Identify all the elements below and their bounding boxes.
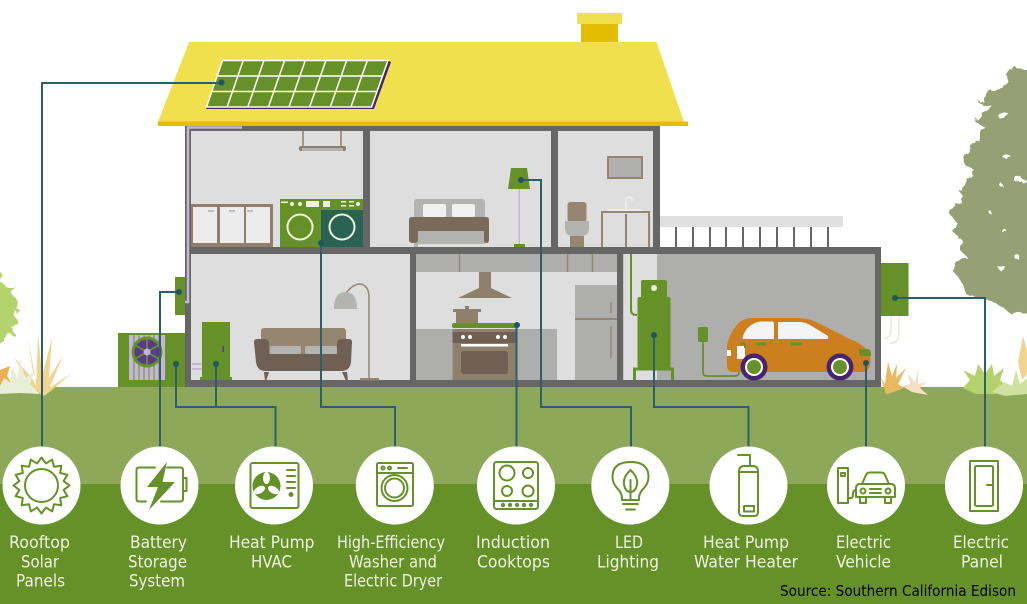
- label: electric vehicle: [836, 533, 891, 572]
- label: electric vehicle: Electric: [836, 533, 891, 553]
- laundry cabinets: [191, 204, 273, 247]
- right plants: [881, 336, 1027, 396]
- electric panel unit: [881, 263, 908, 343]
- left plants: [0, 334, 72, 396]
- room: bedroom: [370, 131, 551, 247]
- right tree: [950, 68, 1027, 320]
- walls: [185, 126, 881, 387]
- label: heat pump hvac: HVAC: [251, 552, 292, 572]
- line: water heater: [654, 335, 748, 447]
- line: induction: [516, 325, 518, 447]
- line: led: [521, 180, 631, 447]
- ceiling light: [299, 131, 346, 151]
- icon: led bulb: [591, 446, 669, 524]
- label: high-efficiency washer and electric dryer: [337, 533, 445, 592]
- label: electric panel: Panel: [961, 552, 1003, 572]
- kitchen background: [416, 254, 617, 380]
- icon: heat pump hvac: [235, 446, 313, 524]
- label: heat pump water heater: Water Heater: [694, 552, 798, 572]
- indoor air handler: [192, 322, 232, 380]
- induction stove: [452, 306, 518, 380]
- room: kitchen: [416, 254, 617, 380]
- house structure: [185, 126, 881, 387]
- label: battery storage system: [128, 533, 187, 592]
- label: induction cooktops: Induction: [476, 533, 550, 553]
- label: heat pump water heater: Heat Pump: [703, 533, 789, 553]
- line: solar: [42, 83, 221, 447]
- icon: electric vehicle: [827, 446, 905, 524]
- solar conduit: [180, 128, 242, 302]
- label: electric panel: Electric: [953, 533, 1009, 553]
- label: rooftop solar panels: Solar: [21, 552, 59, 572]
- icon: rooftop solar: [2, 446, 80, 524]
- ev charger and cable: [698, 327, 739, 376]
- roof: [158, 42, 688, 126]
- icon: water heater: [710, 446, 788, 524]
- mirror: [607, 156, 643, 179]
- label: heat pump hvac: Heat Pump: [229, 533, 314, 553]
- label: heat pump water heater: [694, 533, 798, 572]
- sofa: [254, 328, 352, 381]
- label: led lighting: Lighting: [597, 552, 659, 572]
- battery unit: [175, 277, 185, 315]
- connector dots: [173, 80, 898, 367]
- line: hvac: [176, 364, 276, 447]
- label: battery storage system: System: [129, 572, 185, 592]
- label: led lighting: LED: [615, 533, 643, 553]
- arc lamp: [334, 284, 379, 380]
- room: living room: [191, 254, 410, 380]
- sink cabinet: [602, 197, 649, 247]
- icon: battery: [120, 446, 198, 524]
- connector lines: [42, 80, 985, 447]
- icon: electric panel: [945, 446, 1023, 524]
- label: electric panel: [953, 533, 1009, 572]
- pot: [453, 306, 481, 323]
- floor lamp: [508, 168, 530, 247]
- label: led lighting: [597, 533, 659, 572]
- label: rooftop solar panels: Rooftop: [9, 533, 70, 553]
- fridge: [575, 285, 617, 380]
- ground: [0, 387, 1027, 604]
- label: high-efficiency washer and electric dryer: High-Efficiency: [337, 533, 445, 553]
- solar panel: [206, 60, 391, 109]
- water heater: [624, 254, 672, 380]
- room: garage: [623, 254, 875, 380]
- chimney: [577, 13, 622, 43]
- electric car: [727, 318, 871, 380]
- washer and dryer: [280, 199, 363, 247]
- label: high-efficiency washer and electric dryer: Washer and: [349, 552, 437, 572]
- label: induction cooktops: Cooktops: [477, 552, 550, 572]
- icon: induction cooktop: [477, 446, 555, 524]
- line: panel: [895, 298, 985, 447]
- label: battery storage system: Storage: [128, 552, 187, 572]
- toilet: [565, 202, 589, 247]
- label: induction cooktops: [476, 533, 550, 572]
- label: heat pump hvac: [229, 533, 314, 572]
- left tree: [0, 262, 21, 347]
- room: bathroom: [558, 131, 653, 247]
- icon: washer: [356, 446, 434, 524]
- label: rooftop solar panels: Panels: [16, 572, 65, 592]
- label: high-efficiency washer and electric dryer: Electric Dryer: [344, 572, 442, 592]
- wheels: [740, 354, 854, 380]
- heat pump outdoor unit: [118, 333, 185, 387]
- label: electric vehicle: Vehicle: [836, 552, 891, 572]
- label: rooftop solar panels: [9, 533, 70, 592]
- deck railing: [660, 216, 843, 247]
- line: washer: [321, 243, 395, 447]
- room: laundry: [191, 131, 363, 247]
- label: battery storage system: Battery: [130, 533, 187, 553]
- line: ev: [865, 363, 867, 447]
- line: battery: [160, 292, 179, 447]
- range hood: [458, 272, 512, 298]
- bed: [409, 199, 489, 247]
